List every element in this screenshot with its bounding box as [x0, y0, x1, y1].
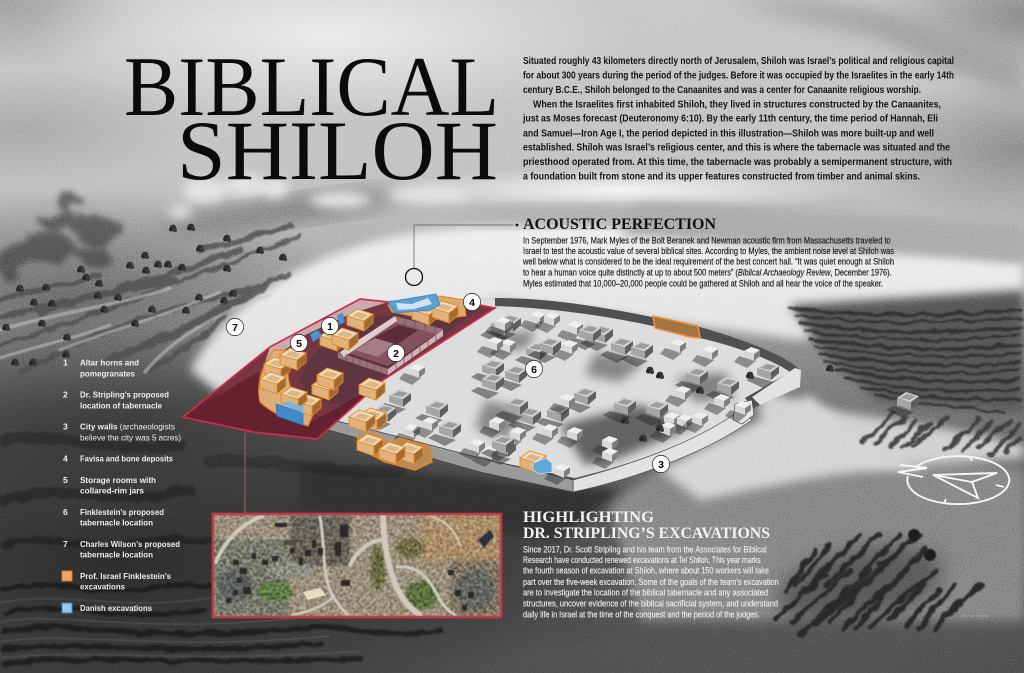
legend: Favisa and bone deposits — [80, 454, 173, 464]
Stripling's tabernacle fence (2) — [338, 316, 443, 375]
legend: 7 — [63, 539, 68, 549]
number markers: 6 — [531, 364, 537, 376]
intro text: a foundation built from stone and its upper features constructed from timber and animal skins. — [523, 172, 920, 183]
intro text: established. Shiloh was Israel’s religious center, and this is where the tabernacle was situated and the — [523, 143, 950, 154]
site illustration — [183, 293, 919, 513]
legend: 6 — [63, 507, 68, 517]
intro text: priesthood operated from. At this time, the tabernacle was probably a semipermanent structure, with — [523, 157, 952, 168]
vineyard rows right — [862, 413, 1020, 455]
highlighting excavations section: daily life in Israel at the time of the conquest and the period of the judges. — [523, 609, 760, 619]
Finkelstein excavations, orange — [259, 296, 700, 473]
legend: 1 — [63, 358, 68, 368]
acoustic perfection section: Israel to test the acoustic value of several biblical sites. According to Myles, the ambient noise level at Shiloh was — [523, 246, 894, 256]
legend: tabernacle location — [80, 518, 153, 528]
highlighting excavations section: HIGHLIGHTING — [523, 509, 655, 526]
number markers: 2 — [393, 348, 399, 360]
acoustic perfection section: well below what is considered to be the ideal requirement of the best concert hall. “It was quiet enough at Shiloh — [522, 257, 894, 267]
legend: Danish excavations — [80, 603, 152, 613]
brush strokes left — [0, 225, 300, 372]
number markers: 3 — [658, 459, 664, 471]
legend: 4 — [63, 454, 68, 464]
dark clouds left — [0, 197, 126, 284]
cloud puffs — [168, 174, 470, 218]
city houses — [363, 311, 919, 485]
Wilson's proposed tabernacle location (7) — [183, 298, 495, 513]
tree rows lower right — [769, 532, 951, 638]
acoustic perfection section: ACOUSTIC PERFECTION — [523, 216, 716, 233]
scattered trees — [2, 224, 287, 366]
highlighting excavations section: part over the five-week excavation. Some of the goals of the team’s excavation — [523, 577, 779, 587]
legend: 2 — [63, 390, 68, 400]
legend: pomegranates — [80, 369, 135, 379]
number markers: 4 — [469, 297, 475, 309]
image credit: Michael Hassan — [961, 613, 989, 618]
title: BIBLICAL — [124, 40, 499, 134]
legend: 3 — [63, 422, 68, 432]
legend: location of tabernacle — [80, 400, 162, 410]
acoustic perfection section: to hear a human voice quite distinctly at up to about 500 meters” (Biblical Archaeology Review, December 1976). — [523, 267, 892, 277]
acoustic perfection section: In September 1976, Mark Myles of the Bolt Beranek and Newman acoustic firm from Massachusetts traveled to — [523, 235, 891, 245]
legend: Storage rooms with — [80, 475, 156, 485]
legend: Prof. Israel Finklestein’s — [80, 571, 171, 581]
callout ring and leader line — [406, 225, 513, 286]
intro text: and Samuel—Iron Age I, the period depicted in this illustration—Shiloh was more built-up and well — [523, 128, 934, 139]
legend: collared-rim jars — [80, 486, 144, 496]
outer wall — [310, 298, 801, 492]
legend: Altar horns and — [80, 358, 139, 368]
legend: City walls (archaeologists — [80, 422, 175, 432]
city ground — [284, 299, 798, 478]
highlighting excavations section: DR. STRIPLING’S EXCAVATIONS — [523, 525, 770, 542]
highlighting excavations section: structures, uncover evidence of the biblical sacrificial system, and understand — [523, 599, 778, 609]
highlighting excavations section: the fourth season of excavation at Shiloh, where about 150 workers will take — [523, 566, 769, 576]
title: SHILOH — [177, 104, 498, 198]
title — [124, 40, 499, 198]
legend: Charles Wilson’s proposed — [80, 539, 180, 549]
intro text: just as Moses forecast (Deuteronomy 6:10). By the early 11th century, the time period of Hannah, Eli — [522, 114, 938, 125]
legend: Finklestein’s proposed — [80, 507, 164, 517]
legend: tabernacle location — [80, 550, 153, 560]
highlighting excavations section: are to investigate the location of the biblical tabernacle and any associated — [523, 588, 768, 598]
dark lower left washes — [4, 438, 440, 664]
highlighting excavations section — [523, 509, 779, 619]
number markers — [226, 293, 670, 473]
Danish excavations, blue — [276, 294, 552, 474]
aerial photo of the excavations — [213, 514, 501, 617]
legend — [62, 358, 181, 613]
number markers: 5 — [296, 338, 302, 350]
acoustic perfection section: Myles estimated that 10,000–20,000 people could be gathered at Shiloh and all hear the voice of the speaker. — [523, 278, 883, 288]
legend: Dr. Stripling’s proposed — [80, 390, 169, 400]
number markers: 7 — [232, 322, 238, 334]
compass icon — [898, 456, 1009, 504]
sweeping bright hill around the site — [190, 223, 1024, 410]
intro text — [522, 56, 954, 183]
highlighting excavations section: Research have conducted renewed excavations at Tel Shiloh. This year marks — [523, 555, 761, 565]
legend: believe the city was 5 acres) — [80, 432, 181, 442]
intro text: century B.C.E., Shiloh belonged to the Canaanites and was a center for Canaanite religious worship. — [523, 85, 921, 96]
number markers: 1 — [327, 321, 333, 333]
legend: excavations — [80, 582, 125, 592]
highlighting excavations section: Since 2017, Dr. Scott Stripling and his team from the Associates for Biblical — [523, 545, 767, 555]
acoustic perfection section — [516, 216, 894, 288]
legend: 5 — [63, 475, 68, 485]
intro text: When the Israelites first inhabited Shiloh, they lived in structures constructed by the Canaanites, — [533, 99, 941, 110]
dark field strokes right — [790, 308, 1020, 412]
